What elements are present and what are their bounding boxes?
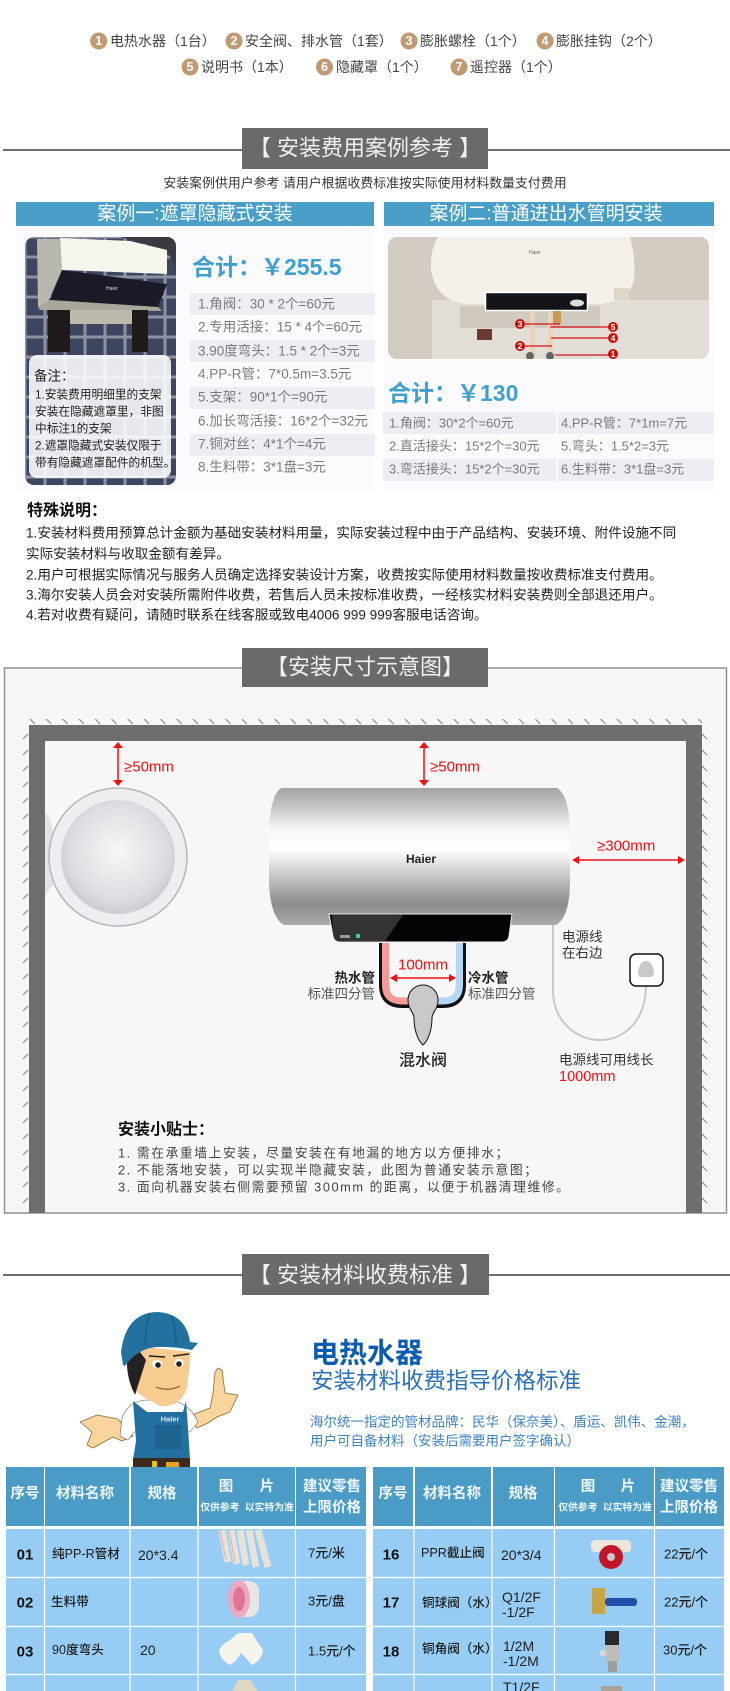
case 1 photo: Haier	[106, 286, 118, 292]
icon: PP-R pipes	[220, 1530, 268, 1567]
heading: 安装费用案例参考	[3, 128, 730, 169]
right table header: 规格	[508, 1484, 538, 1502]
package contents list: 说明书（1本）	[201, 59, 293, 75]
case 2 cost list: 1.角阀：30*2个=60元	[389, 416, 514, 430]
mixing valve	[408, 985, 438, 1045]
left table header: 序号	[10, 1484, 40, 1502]
right table header: 仅供参考 以实特为准	[558, 1500, 652, 1514]
package contents list: 7	[456, 60, 463, 74]
package contents list: 膨胀挂钩（2个）	[556, 33, 662, 49]
case 1 cost list: 5.支架：90*1个=90元	[198, 390, 327, 404]
case 1 cost list: 2.专用活接：15 * 4个=60元	[198, 318, 362, 334]
icon: elbow	[219, 1633, 263, 1665]
hot and cold pipes	[384, 943, 461, 1003]
power cord and socket	[553, 925, 663, 1040]
case 2 photo	[388, 237, 709, 360]
case 2 cost list: 6.生料带：3*1盘=3元	[561, 462, 684, 476]
case 2 cost list: 2.直活接头：15*2个=30元	[389, 438, 540, 454]
case 1 cost list: 8.生料带：3*1盘=3元	[198, 458, 326, 474]
case 1 photo	[25, 237, 176, 485]
right table rows	[373, 1529, 724, 1691]
right table header: 片	[621, 1478, 635, 1495]
left table header	[6, 1467, 366, 1526]
pipe labels: 标准四分管	[468, 986, 536, 1002]
note box: 2.遮罩隐藏式安装仅限于	[35, 438, 162, 452]
right table header: 建议零售	[660, 1477, 718, 1495]
right table header: 图	[581, 1478, 595, 1495]
right table rows: -1/2F	[502, 1604, 535, 1620]
special notes	[26, 500, 676, 622]
package contents list: 3	[406, 34, 413, 48]
case 2 cost list: 5.弯头：1.5*2=3元	[561, 438, 669, 454]
price standard title: 电热水器	[311, 1338, 423, 1368]
special notes: 实际安装材料与收取金额有差异。	[26, 546, 230, 562]
icon: row 19 fitting	[601, 1686, 622, 1691]
panel: installation dimension diagram	[4, 668, 726, 1213]
case 2 cost list: 3.弯活接头：15*2个=30元	[389, 462, 540, 476]
installation tips: 3. 面向机器安装右侧需要预留 300mm 的距离，以便于机器清理维修。	[118, 1180, 571, 1194]
installation tips: 1. 需在承重墙上安装，尽量安装在有地漏的地方以方便排水；	[118, 1146, 510, 1162]
left table header: 建议零售	[303, 1477, 361, 1495]
pipe labels: 标准四分管	[308, 986, 375, 1002]
right table rows: 30元/个	[663, 1642, 707, 1658]
pipe labels: 冷水管	[468, 970, 508, 986]
brand: Haier	[406, 852, 436, 866]
left table rows: 纯PP-R管材	[52, 1546, 120, 1561]
power cord labels: 在右边	[562, 946, 603, 960]
control panel	[329, 914, 512, 942]
dimension labels: ≥50mm	[124, 758, 174, 776]
case 2 cost list	[383, 412, 714, 481]
case 1 total: 合计：￥255.5	[192, 254, 342, 280]
left table rows: 7元/米	[308, 1546, 345, 1560]
right table rows: 16	[383, 1546, 399, 1564]
special notes: 特殊说明：	[27, 500, 107, 520]
left table header: 仅供参考 以实特为准	[200, 1500, 294, 1514]
right table rows: 17	[383, 1594, 399, 1612]
pipe labels	[308, 970, 536, 1070]
left table header: 规格	[148, 1484, 177, 1502]
right table header: 材料名称	[423, 1484, 481, 1502]
note box: 中标注1的支架	[35, 422, 112, 436]
right table header	[373, 1467, 724, 1526]
note box: 1.安装费用明细里的支架	[35, 388, 162, 402]
case 2 photo: 1	[611, 349, 616, 359]
heater front view	[269, 788, 570, 942]
dimension labels: ≥50mm	[430, 758, 480, 776]
installation tips: 2. 不能落地安装，可以实现半隐藏安装，此图为普通安装示意图；	[118, 1162, 539, 1178]
icon: row 4 fitting	[232, 1680, 258, 1691]
case 1 cost list: 3.90度弯头：1.5 * 2个=3元	[198, 342, 360, 358]
panel: case 1	[16, 202, 375, 492]
heading: 安装材料收费标准: 【 安装材料收费标准 】	[249, 1262, 481, 1288]
left table rows: 20	[140, 1642, 156, 1658]
price standard title: 海尔统一指定的管材品牌：民华（保奈美）、盾运、凯伟、金潮，	[310, 1414, 695, 1430]
price standard title	[310, 1338, 695, 1448]
power cord labels: 电源线	[562, 930, 602, 944]
note box: 带有隐藏遮罩配件的机型。	[35, 456, 175, 470]
heading: 安装尺寸示意图	[242, 648, 488, 687]
case 1 cost list: 6.加长弯活接：16*2个=32元	[198, 412, 368, 428]
note box	[29, 355, 175, 478]
left table rows: 20*3.4	[138, 1547, 179, 1563]
icon: ball valve	[592, 1588, 637, 1614]
package contents list: 5	[187, 60, 194, 74]
case 2 photo: 4	[611, 333, 616, 343]
dimension arrows	[113, 742, 685, 982]
dimension labels: 100mm	[398, 956, 448, 974]
worker mascot	[80, 1312, 238, 1467]
case 1 title	[16, 202, 374, 226]
case 1 cost list: 1.角阀：30 * 2个=60元	[198, 296, 335, 312]
icon: stop valve	[591, 1540, 631, 1569]
case 1 title: 案例一:遮罩隐藏式安装	[97, 202, 293, 224]
power cord labels: 电源线可用线长	[559, 1052, 654, 1068]
package contents list: 1	[95, 34, 102, 48]
right table rows: 铜球阀（水）	[422, 1595, 498, 1610]
left table rows: 3元/盘	[308, 1594, 345, 1608]
table: materials right	[373, 1467, 724, 1691]
package contents list: 膨胀螺栓（1个）	[420, 33, 526, 49]
case 2 photo: Haier	[529, 250, 541, 256]
right table rows: 22元/个	[664, 1546, 708, 1562]
pipe labels: 混水阀	[399, 1052, 447, 1070]
table: materials left	[6, 1467, 366, 1691]
case 2 photo: 3	[518, 319, 523, 329]
side view of heater	[45, 788, 187, 926]
case 2 cost list: 4.PP-R管：7*1m=7元	[561, 416, 687, 430]
left table header: 片	[260, 1478, 274, 1495]
right table rows: 18	[383, 1644, 399, 1660]
case 2 title: 案例二:普通进出水管明安装	[429, 202, 663, 224]
case 2 photo: 5	[611, 322, 616, 332]
heading: 安装费用案例参考: 【 安装费用案例参考 】	[249, 136, 481, 160]
right table rows: 1/2M	[503, 1638, 534, 1654]
left table rows: 1.5元/个	[308, 1644, 356, 1658]
special notes: 2.用户可根据实际情况与服务人员确定选择安装设计方案，收费按实际使用材料数量按收费标准支付费用。	[26, 566, 663, 582]
note box: 安装在隐藏遮罩里，非图	[35, 404, 164, 418]
power cord labels: 1000mm	[559, 1069, 615, 1085]
wall	[23, 719, 708, 1213]
case 2 total: 合计：￥130	[388, 380, 518, 406]
right table header: 上限价格	[660, 1498, 718, 1516]
right table rows: 22元/个	[664, 1594, 708, 1610]
package contents list: 安全阀、排水管（1套）	[245, 33, 393, 49]
package contents list: 2	[231, 34, 238, 48]
package contents list: 隐藏罩（1个）	[336, 59, 428, 75]
special notes: 4.若对收费有疑问，请随时联系在线客服或致电4006 999 999客服电话咨询。	[26, 606, 488, 622]
left table header: 图	[219, 1478, 233, 1495]
power cord labels	[559, 930, 654, 1085]
worker mascot: Haier	[161, 1414, 179, 1424]
special notes: 3.海尔安装人员会对安装所需附件收费，若售后人员未按标准收费，一经核实材料安装费则全部退还用户。	[26, 586, 663, 602]
price standard title: 安装材料收费指导价格标准	[311, 1368, 581, 1394]
right table rows: 铜角阀（水）	[422, 1642, 498, 1656]
price standard title: 用户可自备材料（安装后需要用户签字确认）	[310, 1432, 580, 1448]
icon: sealing tape	[228, 1580, 259, 1618]
case 2 title	[384, 202, 714, 226]
dimension labels	[124, 758, 655, 974]
left table header: 上限价格	[303, 1498, 361, 1516]
case 1 cost list	[190, 293, 375, 474]
left table rows: 90度弯头	[52, 1642, 104, 1657]
right table rows: 20*3/4	[501, 1547, 542, 1563]
heading: 安装尺寸示意图: 【安装尺寸示意图】	[266, 654, 464, 680]
panel: case 2	[383, 202, 714, 492]
right table rows: Q1/2F	[502, 1589, 541, 1605]
heading: 安装材料收费标准	[3, 1254, 730, 1295]
installation tips	[118, 1120, 571, 1194]
note box: 备注：	[34, 368, 74, 384]
left table rows: 02	[17, 1594, 33, 1612]
package contents list	[90, 32, 662, 76]
left table rows: 03	[17, 1644, 33, 1660]
subtitle: 安装案例供用户参考 请用户根据收费标准按实际使用材料数量支付费用	[163, 176, 567, 190]
special notes: 1.安装材料费用预算总计金额为基础安装材料用量，实际安装过程中由于产品结构、安装环境、附件设施不同	[26, 524, 676, 540]
pipe labels: 热水管	[334, 970, 375, 986]
case 2 photo: 2	[518, 341, 523, 351]
right table header: 序号	[378, 1484, 408, 1502]
installation tips: 安装小贴士：	[118, 1120, 214, 1138]
package contents list: 4	[542, 34, 549, 48]
package contents list: 6	[321, 60, 328, 74]
left table rows: 01	[17, 1546, 33, 1564]
left table rows: 生料带	[51, 1595, 89, 1609]
dimension labels: ≥300mm	[597, 838, 655, 854]
right table rows: PPR截止阀	[421, 1545, 485, 1560]
right table rows: -1/2M	[503, 1653, 539, 1669]
case 1 cost list: 4.PP-R管：7*0.5m=3.5元	[198, 366, 351, 382]
left table rows	[6, 1529, 366, 1691]
case 1 cost list: 7.铜对丝：4*1个=4元	[198, 436, 326, 452]
icon: angle valve	[600, 1631, 619, 1672]
package contents list: 电热水器（1台）	[110, 33, 216, 49]
left table header: 材料名称	[56, 1484, 114, 1502]
package contents list: 遥控器（1个）	[470, 59, 562, 75]
